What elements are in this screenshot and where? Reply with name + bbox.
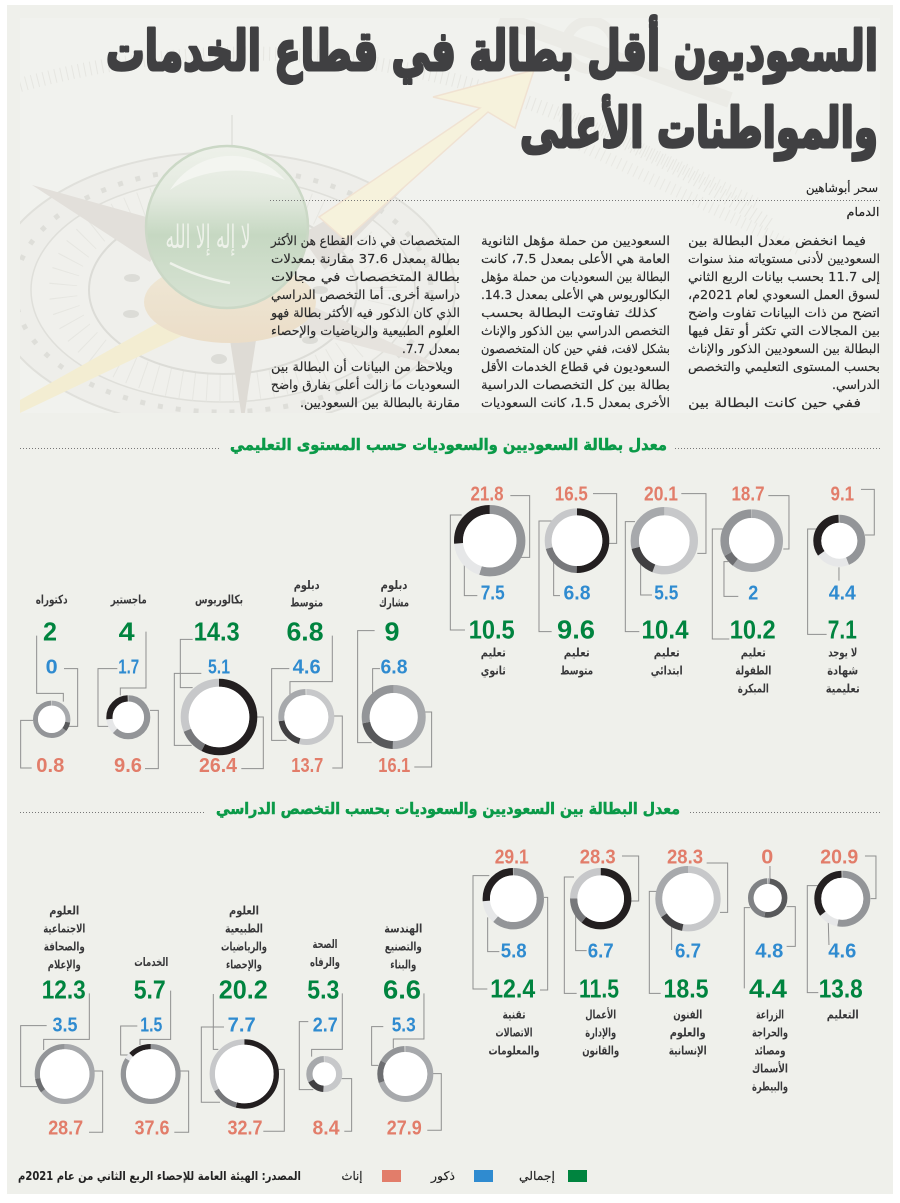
chart: doctorate (21, 592, 78, 777)
chart: doctorate: 0.8 (36, 755, 64, 777)
chart: engineering: والتصنيع (385, 940, 422, 955)
chart: health: 5.3 (307, 974, 339, 1004)
article text column 3: العلوم الطبيعية والرياضيات والإحصاء (271, 323, 460, 339)
chart: secondary: 10.5 (469, 614, 515, 644)
chart: ICT (473, 846, 548, 1058)
chart: social sciences: والإعلام (48, 958, 81, 973)
chart: secondary: تعليم (481, 646, 506, 660)
chart: natural sciences: والإحصاء (226, 958, 262, 973)
chart: ICT: تقنية (502, 1007, 526, 1021)
article text column 3: بطالة المتخصصات في مجالات (271, 269, 460, 284)
chart: social sciences: والصحافة (44, 940, 85, 955)
article text column 1: بين المجالات التي تكثر أو تقل فيها (688, 322, 880, 339)
chart: early childhood: تعليم (741, 646, 766, 660)
legend: ذكور (430, 1169, 455, 1184)
chart: ICT: 5.8 (501, 940, 527, 962)
article text column 3: السعوديات ما زالت أعلى بفارق واضح (271, 376, 460, 393)
article text column 2: بشكل لافت، ففي حين كان المتخصصون (481, 341, 670, 357)
article text column 3: بمعدل 7.7. (402, 341, 460, 356)
chart: natural sciences: والرياضيات (221, 940, 267, 955)
chart: services (121, 955, 189, 1139)
chart: associate diploma: 16.1 (378, 755, 410, 777)
chart: ICT: والمعلومات (488, 1043, 540, 1058)
chart: bachelor: 5.1 (208, 656, 230, 678)
chart: business, administration and law: والقانون (582, 1043, 619, 1058)
chart: services: 37.6 (134, 1117, 170, 1139)
chart: social sciences: 3.5 (52, 1015, 78, 1037)
article text column 2: البطالة بين السعوديات من حملة مؤهل (481, 269, 670, 285)
chart: health: الصحة (312, 937, 338, 951)
chart: engineering: الهندسة (384, 922, 422, 936)
chart: natural sciences: 7.7 (228, 1015, 256, 1037)
heading: education level: معدل بطالة السعوديين والسعوديات حسب المستوى التعليمي (230, 436, 667, 455)
chart: secondary: 21.8 (470, 484, 504, 506)
article text column 3: المتخصصات في ذات القطاع هن الأكثر (270, 233, 460, 249)
chart: education: 4.6 (828, 940, 856, 962)
chart: health: 2.7 (313, 1015, 338, 1037)
chart: agriculture: 4.8 (755, 940, 783, 962)
article text column 1: الدراسي. (832, 377, 880, 393)
chart: associate diploma: دبلوم (380, 578, 408, 593)
chart: education: 20.9 (820, 846, 858, 868)
chart: agriculture: 0 (761, 846, 773, 868)
chart: natural sciences: العلوم (229, 904, 259, 919)
chart: no certificate (808, 484, 874, 696)
chart: agriculture: 4.4 (749, 973, 788, 1003)
chart: intermediate diploma: دبلوم (294, 578, 320, 593)
chart: agriculture: والحراجة (752, 1025, 788, 1040)
chart: ICT: 12.4 (490, 973, 536, 1003)
chart: social sciences: 12.3 (42, 974, 86, 1004)
chart: associate diploma: 6.8 (380, 656, 408, 678)
chart: arts and humanities: 6.7 (675, 940, 701, 962)
chart: arts and humanities: 28.3 (667, 846, 703, 868)
chart: early childhood: المبكرة (738, 682, 769, 696)
heading: field of study: معدل البطالة بين السعوديين والسعوديات بحسب التخصص الدراسي (216, 800, 680, 819)
chart: health (299, 937, 352, 1139)
chart: no certificate: تعليمية (826, 682, 860, 696)
chart: services: الخدمات (134, 955, 168, 969)
chart: master: 1.7 (118, 656, 139, 678)
chart: social sciences: 28.7 (48, 1117, 83, 1139)
chart: agriculture: والبيطرة (752, 1079, 788, 1094)
chart: ICT: 29.1 (495, 846, 529, 868)
chart: agriculture (744, 846, 795, 1094)
chart: primary: تعليم (654, 646, 680, 660)
chart: secondary: ثانوي (481, 664, 506, 679)
hero illustration: compass, globe and arrow: لا إله إلا الله (166, 218, 250, 256)
chart: early childhood: 10.2 (730, 614, 776, 644)
chart: associate diploma: مشارك (379, 596, 409, 610)
article text column 2: العامة هي الأعلى بمعدل 7.5، كانت (481, 251, 670, 266)
article text column 2: التخصص الدراسي بين الذكور والإناث (481, 323, 670, 339)
chart: education: التعليم (827, 1007, 859, 1021)
article text column 2: كذلك تفاوتت البطالة بحسب (481, 305, 657, 321)
chart: business, administration and law: 11.5 (579, 973, 619, 1003)
article text column 1: فيما انخفض معدل البطالة بين (688, 233, 866, 249)
chart: arts and humanities: الفنون (673, 1007, 702, 1022)
article text column 2: السعوديين من حملة مؤهل الثانوية (481, 233, 670, 249)
chart: natural sciences: الطبيعية (225, 922, 263, 936)
chart: early childhood: 2 (748, 582, 758, 604)
chart: services: 5.7 (134, 974, 166, 1004)
chart: services: 1.5 (140, 1015, 162, 1037)
chart: social sciences (21, 904, 103, 1139)
chart: master: ماجستير (110, 592, 147, 606)
article text column 1: السعوديين لأدنى مستوياته منذ سنوات (688, 251, 880, 267)
article text column 2: البكالوريوس هي الأعلى بمعدل 14.3. (481, 287, 670, 303)
chart: intermediate diploma (272, 578, 342, 777)
chart: engineering: 6.6 (383, 974, 421, 1004)
chart: master: 4 (119, 616, 135, 646)
chart: no certificate: 4.4 (829, 582, 857, 604)
chart: arts and humanities: 18.5 (664, 973, 708, 1003)
chart: primary: 10.4 (642, 614, 689, 644)
chart: natural sciences (201, 904, 284, 1139)
chart: business, administration and law: الأعمال (585, 1006, 616, 1021)
chart: intermediate: 6.8 (564, 582, 590, 604)
chart: intermediate: متوسط (560, 664, 593, 679)
chart: no certificate: 9.1 (830, 484, 854, 506)
legend: إناث (342, 1169, 362, 1183)
chart: bachelor: 14.3 (194, 616, 240, 646)
chart: bachelor: بكالوريوس (195, 592, 243, 607)
chart: early childhood (712, 484, 789, 696)
chart: arts and humanities: الإنسانية (669, 1043, 707, 1057)
article text column 3 (270, 233, 460, 411)
chart: agriculture: الزراعة (756, 1007, 784, 1021)
chart: engineering: 27.9 (387, 1117, 422, 1139)
chart: early childhood: الطفولة (735, 664, 771, 679)
chart: secondary: 7.5 (481, 582, 505, 604)
chart: no certificate: شهادة (827, 664, 858, 678)
article text column 1: ففي حين كانت البطالة بين (688, 395, 861, 411)
article text column 1 (688, 233, 880, 411)
legend: إجمالي (519, 1169, 555, 1183)
chart: intermediate diploma: 4.6 (293, 656, 321, 678)
article text column 2 (481, 233, 670, 411)
byline (270, 180, 880, 219)
chart: doctorate: 0 (46, 656, 58, 678)
article text column 3: ويلاحظ من البيانات أن البطالة بين (271, 358, 453, 375)
chart: education (807, 846, 876, 1021)
chart: associate diploma (358, 578, 432, 777)
article text column 2: الأخرى بمعدل 1.5، كانت السعوديات (481, 395, 670, 411)
chart: arts and humanities (649, 846, 728, 1057)
legend (342, 1169, 587, 1184)
chart: health: والرفاه (310, 955, 340, 970)
chart: no certificate: 7.1 (828, 614, 857, 644)
chart: early childhood: 18.7 (732, 484, 764, 506)
chart: business, administration and law: 6.7 (588, 940, 614, 962)
chart: doctorate: دكتوراه (36, 592, 68, 607)
chart: natural sciences: 32.7 (228, 1117, 262, 1139)
chart: education: 13.8 (819, 973, 863, 1003)
article text column 1: إلى 11.7 بحسب بيانات الربع الثاني (688, 269, 880, 285)
article text column 2: السعوديون في قطاع الخدمات الأقل (481, 359, 670, 375)
chart: business, administration and law (564, 846, 639, 1058)
article text column 2: بطالة بين كل التخصصات الدراسية (481, 377, 670, 393)
chart: health: 8.4 (312, 1117, 340, 1139)
chart: engineering (372, 922, 441, 1139)
chart: social sciences: الاجتماعية (43, 922, 85, 936)
article text column 3: دراسية أخرى. أما التخصص الدراسي (271, 286, 460, 303)
byline: سحر أبوشاهين (806, 180, 878, 196)
chart: intermediate (539, 484, 617, 679)
chart: doctorate: 2 (43, 616, 57, 646)
chart: intermediate diploma: 13.7 (291, 755, 323, 777)
article text column 1: البطالة بين السعوديين الذكور والإناث (688, 341, 880, 357)
chart: intermediate: تعليم (564, 646, 590, 660)
source note: المصدر: الهيئة العامة للإحصاء الربع الثاني من عام 2021م (18, 1169, 301, 1184)
chart: business, administration and law: والإدارة (585, 1025, 616, 1040)
chart: agriculture: ومصائد (754, 1043, 786, 1058)
article text column 1: لسوق العمل السعودي لعام 2021م، (688, 287, 880, 303)
chart: primary: ابتدائي (651, 664, 683, 678)
byline: الدمام (846, 205, 880, 219)
article text column 1: اتضح من ذات البيانات تفاوت واضح (688, 305, 880, 321)
hero illustration: compass, globe and arrow (20, 46, 772, 413)
chart: master: 9.6 (114, 755, 142, 777)
chart: business, administration and law: 28.3 (580, 846, 616, 868)
title (106, 15, 878, 161)
chart: associate diploma: 9 (384, 616, 400, 646)
chart: intermediate: 9.6 (557, 614, 595, 644)
chart: engineering: 5.3 (392, 1015, 416, 1037)
chart: social sciences: العلوم (49, 904, 79, 919)
article text column 3: مقارنة بالبطالة بين السعوديين. (300, 395, 460, 411)
chart: primary (625, 484, 706, 678)
chart: bachelor (174, 592, 263, 777)
article text column 3: بطالة بمعدل 37.6 مقارنة بمعدلات (271, 251, 460, 267)
chart: ICT: الاتصالات (496, 1025, 532, 1039)
chart: intermediate diploma: متوسط (290, 596, 323, 611)
chart: bachelor: 26.4 (199, 755, 238, 777)
chart: agriculture: الأسماك (752, 1060, 788, 1075)
chart: arts and humanities: والعلوم (670, 1025, 706, 1040)
chart: master (98, 592, 158, 777)
chart: natural sciences: 20.2 (219, 974, 268, 1004)
chart: primary: 5.5 (654, 582, 678, 604)
chart: no certificate: لا يوجد (828, 646, 857, 661)
article text column 1: بحسب المستوى التعليمي والتخصص (688, 359, 880, 375)
article text column 3: الذي كان الذكور فيه الأكثر بطالة فهو (270, 305, 460, 321)
chart: primary: 20.1 (644, 484, 678, 506)
chart: intermediate: 16.5 (555, 484, 588, 506)
chart: engineering: والبناء (390, 958, 416, 973)
chart: intermediate diploma: 6.8 (286, 616, 324, 646)
chart: secondary (450, 484, 530, 679)
